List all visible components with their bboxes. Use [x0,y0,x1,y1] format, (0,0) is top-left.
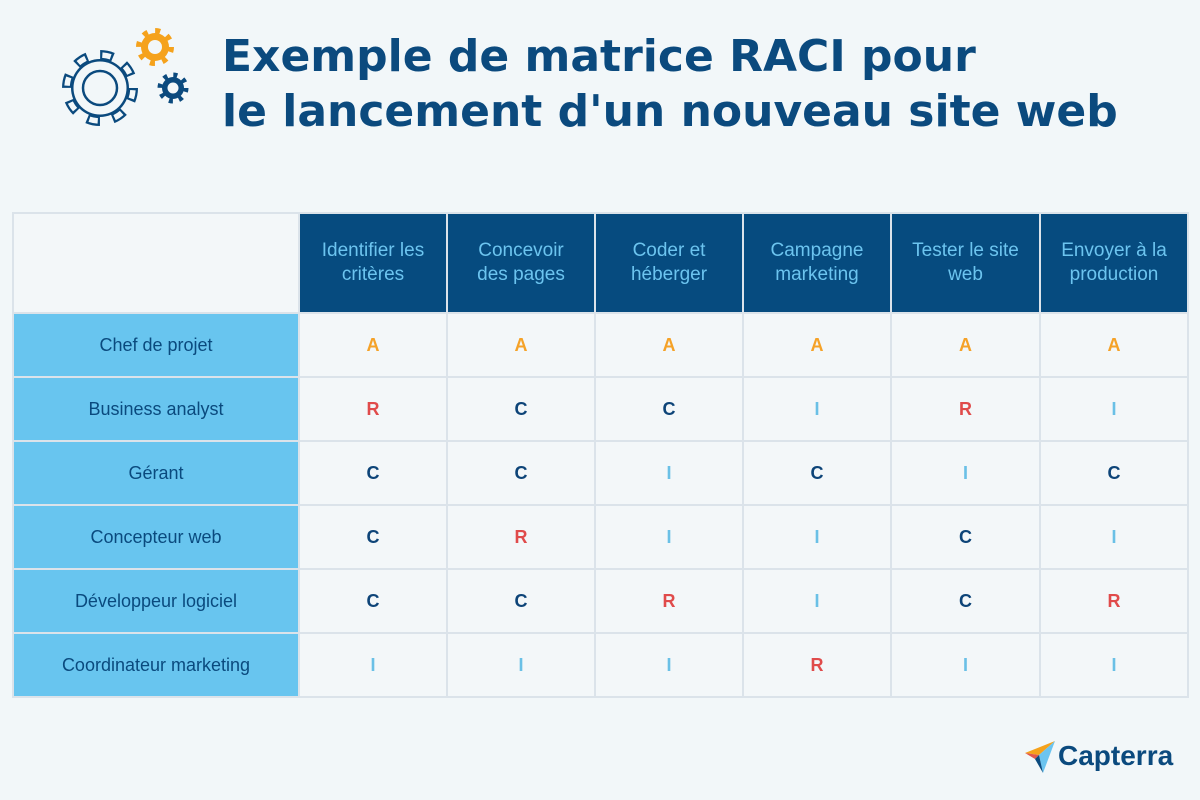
logo: Capterra: Capterra [1058,740,1173,771]
icon: navy gear [160,75,186,101]
RACI table: R [514,526,528,546]
RACI table: A [810,334,824,354]
RACI table: A [959,334,972,354]
RACI table: A [662,334,676,354]
RACI table: C [810,462,824,482]
RACI table: I [814,590,820,610]
RACI table: A [514,334,528,354]
RACI table: I [1111,398,1116,418]
RACI table: Développeur logiciel [75,590,237,610]
RACI table: R [366,398,380,418]
RACI table: des pages [477,264,565,285]
RACI table: I [963,654,968,674]
RACI table: A [366,334,380,354]
RACI table: I [666,462,672,482]
RACI table: Concepteur web [90,526,222,546]
RACI table: Concevoir [478,240,564,261]
title [222,31,1118,137]
RACI table: R [959,398,972,418]
RACI table: R [1108,590,1120,610]
RACI table: R [662,590,676,610]
RACI table: R [810,654,824,674]
RACI table: C [1108,462,1120,482]
RACI table: I [518,654,524,674]
RACI table: I [666,654,672,674]
RACI table: I [963,462,968,482]
icon: orange gear [139,31,171,63]
RACI table [12,212,1189,698]
RACI table: Chef de projet [99,334,213,354]
icon: gears [62,28,188,126]
RACI table: Business analyst [88,398,224,418]
RACI table: Campagne marketing [771,240,863,285]
RACI table: Identifier les critères [322,240,424,285]
RACI table: C [366,590,380,610]
title: Exemple de matrice RACI pour [222,31,976,82]
RACI table: I [370,654,376,674]
RACI table: I [666,526,672,546]
RACI table: C [514,462,528,482]
RACI table: I [1111,526,1116,546]
RACI table: I [1111,654,1116,674]
RACI table: C [959,526,972,546]
RACI table: Gérant [128,462,184,482]
RACI table: C [514,590,528,610]
RACI table: C [366,526,380,546]
icon: large outlined gear [67,55,133,121]
RACI table: A [1108,334,1120,354]
RACI table: Envoyer à la production [1061,240,1167,285]
RACI table: I [814,526,820,546]
RACI table: C [514,398,528,418]
RACI table: C [959,590,972,610]
RACI table: Coder et héberger [631,240,707,285]
RACI table: Coordinateur marketing [62,654,250,674]
RACI table: Tester le site web [912,240,1019,285]
RACI table: C [662,398,676,418]
RACI table: I [814,398,820,418]
RACI table: C [366,462,380,482]
title: le lancement d'un nouveau site web [222,86,1118,137]
